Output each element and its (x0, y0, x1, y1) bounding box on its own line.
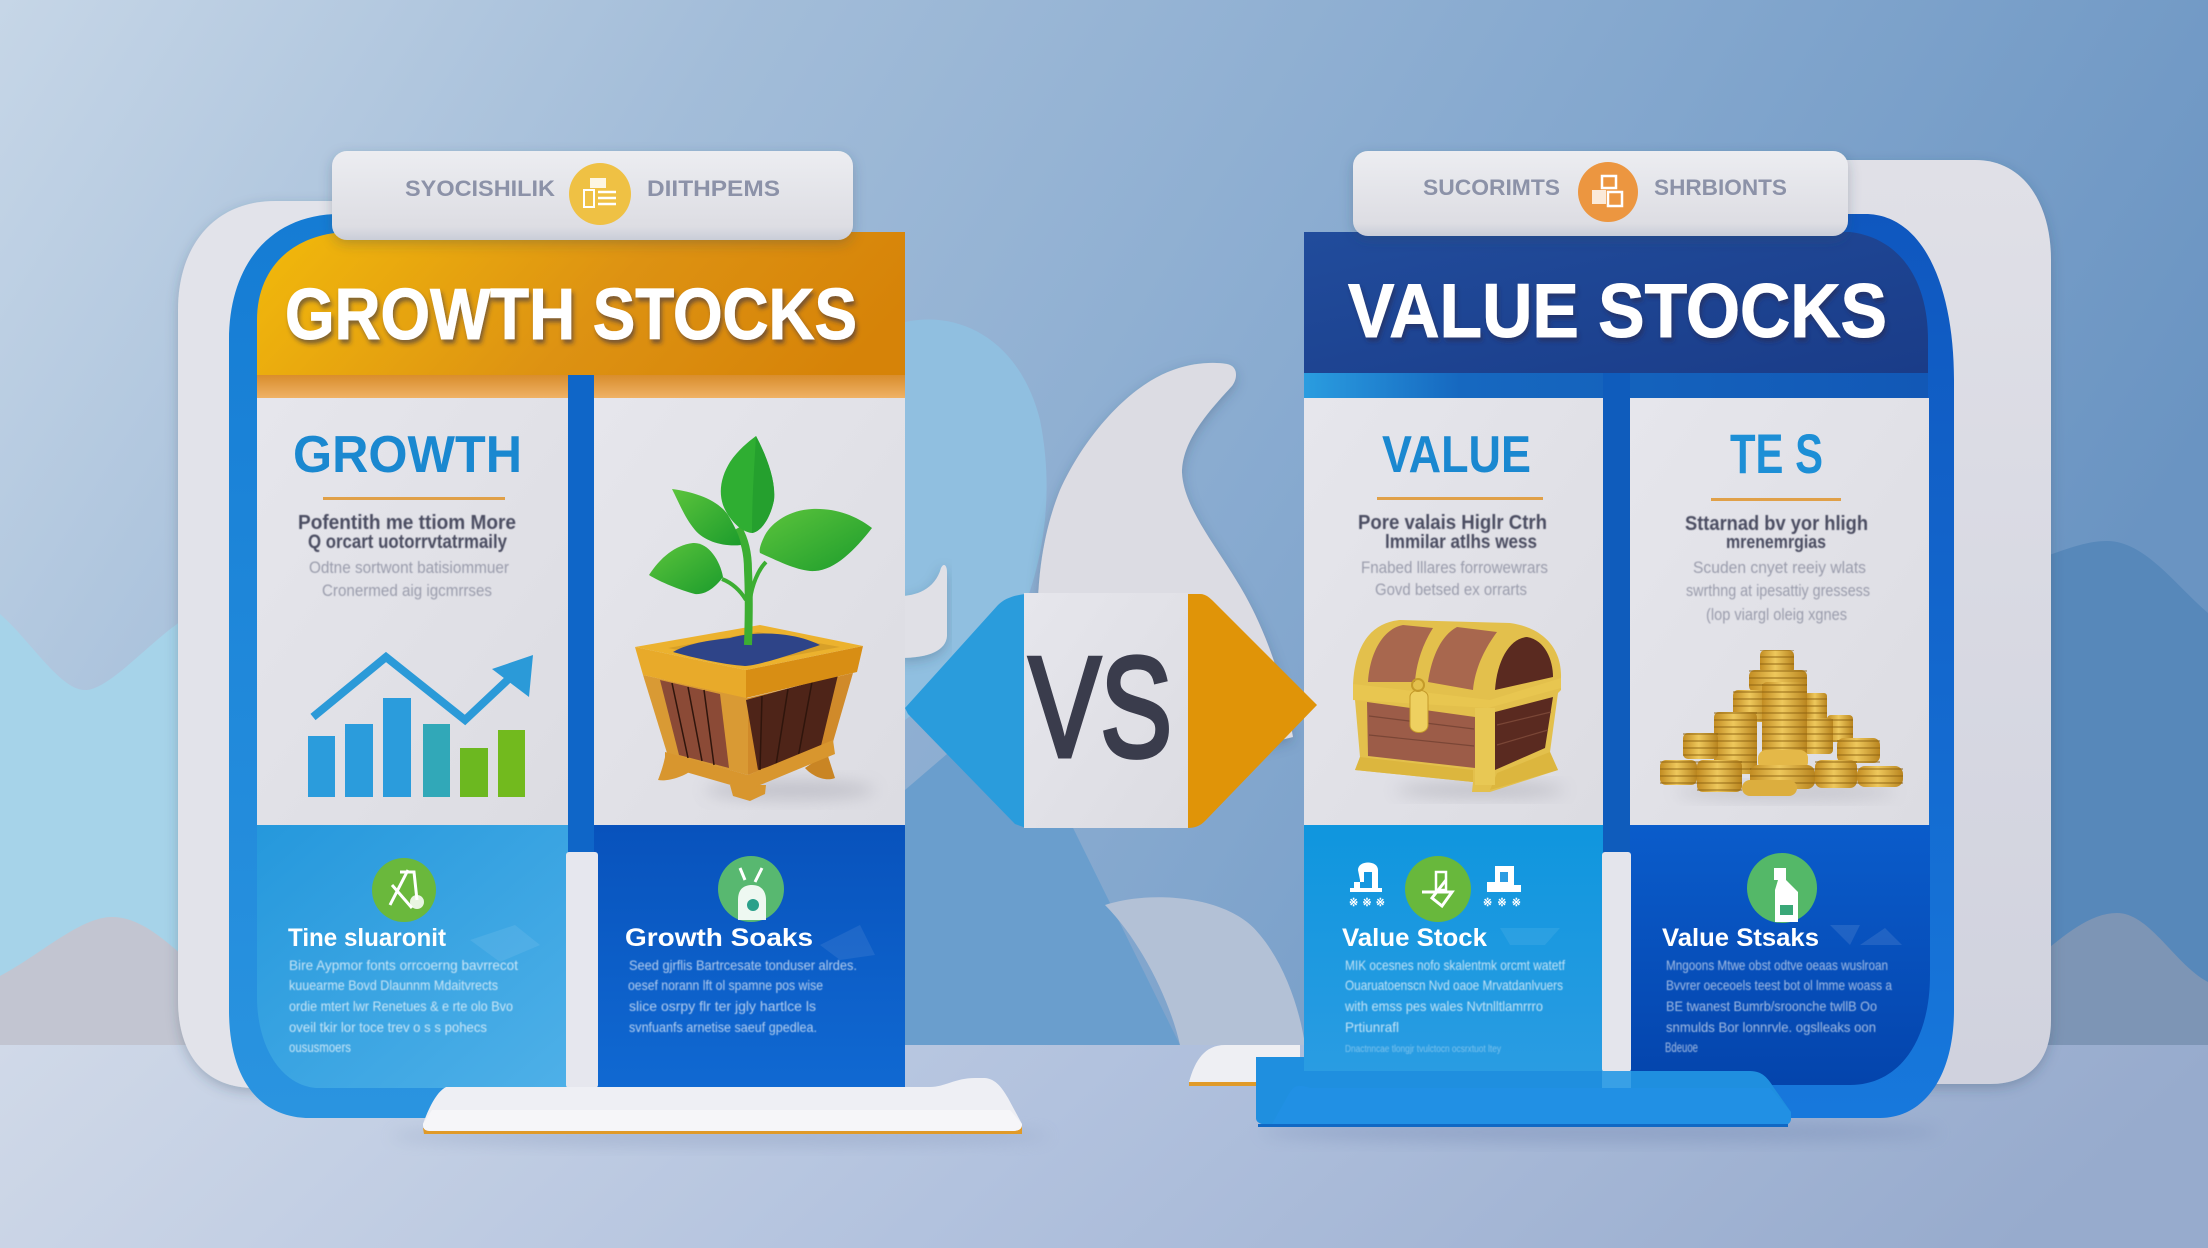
body copy: snmulds Bor lonnrvle. ogslleaks oon (1666, 1019, 1876, 1035)
card: time horizon copy (257, 825, 568, 1088)
card: value stocks copy (1630, 825, 1930, 1085)
column divider (1603, 373, 1630, 855)
white back plate (178, 201, 420, 1088)
body copy: MIK ocesnes nofo skalentmk orcmt watetf (1345, 957, 1565, 973)
heading: Growth Soaks (625, 924, 813, 952)
icon: treasure chest (1353, 620, 1565, 797)
icon: green badge (1405, 856, 1471, 922)
body copy: slice osrpy flr ter jgly hartlce ls (629, 998, 816, 1014)
arrow: orange pointing right (1187, 594, 1317, 828)
icon: side tool left: ※※※ (1349, 897, 1385, 909)
icon: wooden pot (635, 625, 863, 801)
card: value text and treasure chest (1304, 398, 1603, 825)
body copy: svnfuanfs arnetise saeuf gpedlea. (629, 1019, 817, 1035)
small white base behind (1189, 1045, 1300, 1086)
icon: side tool left (1349, 862, 1385, 909)
heading: Tine sluaronit (288, 924, 447, 952)
icon: green plant (649, 436, 872, 645)
card description: Odtne sortwont batisiommuer (309, 558, 509, 577)
white back plate (1800, 160, 2051, 1084)
icon: side tool right: ※※※ (1483, 897, 1521, 909)
arrow: blue pointing left (905, 594, 1026, 828)
body copy: oususmoers (289, 1039, 351, 1055)
vs card (1024, 593, 1188, 828)
icon: orange badge (1578, 162, 1638, 222)
body copy: Prtiunrafl (1345, 1019, 1399, 1035)
label pill (1353, 151, 1848, 236)
icon: green badge (372, 858, 436, 922)
body copy: Bire Aypmor fonts orrcoerng bavrrecot (289, 957, 518, 973)
subheading: value: VALUE (1382, 426, 1531, 484)
label pill: SHRBIONTS (1654, 175, 1787, 200)
body copy (1344, 957, 1565, 1055)
icon: green badge (1747, 853, 1817, 923)
blue frame (1700, 214, 1954, 1118)
card description: Fnabed lllares forrowewrars (1361, 558, 1548, 577)
white post (566, 852, 598, 1088)
panel: growth stocks (178, 151, 1022, 1134)
display base (1256, 1057, 1791, 1127)
card description: (lop viargl oleig xgnes (1706, 605, 1847, 624)
white post (1602, 852, 1631, 1072)
card description: lmmilar atlhs wess (1385, 532, 1537, 553)
card description: Govd betsed ex orrarts (1375, 580, 1527, 599)
body copy: Dnactnncae tlongjr tvulctocn ocsrxtuot ltey (1345, 1044, 1501, 1055)
header under-strip (257, 375, 905, 398)
versus badge (905, 593, 1317, 828)
vs label: VS (1029, 628, 1172, 787)
body copy: BE twanest Bumrb/sroonche twllB Oo (1666, 998, 1877, 1014)
card: growth text and chart (257, 398, 568, 825)
card: TES text and gold coins (1630, 398, 1929, 825)
side tab (900, 565, 947, 658)
icon: yellow badge (569, 163, 631, 225)
card description: Scuden cnyet reeiy wlats (1693, 558, 1866, 577)
body copy: with emss pes wales Nvtnlltlamrrro (1344, 998, 1543, 1014)
card description: Q orcart uotorrvtatrmaily (308, 532, 507, 553)
panel: value stocks (1189, 151, 2051, 1127)
card description: Pofentith me ttiom More (298, 512, 516, 534)
label pill: DIITHPEMS (647, 176, 780, 201)
card description: Pore valais Higlr Ctrh (1358, 512, 1547, 534)
card description: mrenemrgias (1726, 532, 1826, 552)
blue frame (229, 214, 600, 1118)
header band (1304, 232, 1928, 373)
header under-strip (1304, 373, 1928, 398)
header band (257, 232, 905, 375)
card description (298, 512, 516, 600)
body copy: ordie mtert lwr Renetues & e rte olo Bvo (289, 998, 513, 1014)
body copy: Seed gjrflis Bartrcesate tonduser alrdes. (629, 957, 857, 973)
icon: side tool right (1483, 866, 1521, 909)
card: value stock copy (1304, 825, 1603, 1075)
body copy (289, 957, 518, 1055)
label pill (332, 151, 853, 240)
bar chart with rising arrow (308, 655, 533, 797)
body copy: Bdeuoe (1665, 1039, 1698, 1055)
heading: Value Stsaks (1662, 924, 1819, 952)
subheading: growth: GROWTH (293, 426, 522, 484)
icon: green badge (718, 856, 784, 922)
heading: value stocks: VALUE STOCKS (1348, 269, 1887, 354)
card: growth stocks copy (594, 825, 905, 1088)
body copy: oesef norann lft ol spamne pos wise (628, 977, 823, 993)
card description (1358, 512, 1548, 599)
card: plant illustration (594, 398, 905, 825)
body copy: Bvvrer oeceoels teest bot ol lmme woass a (1666, 977, 1892, 993)
body copy: oveil tkir lor toce trev o s s pohecs (289, 1019, 487, 1035)
heading: growth stocks: GROWTH STOCKS (285, 275, 857, 355)
icon: stacks of gold coins (1660, 650, 1903, 799)
body copy (628, 957, 857, 1035)
body copy (1665, 957, 1892, 1055)
card description: swrthng at ipesattiy gressess (1686, 581, 1870, 600)
subheading: tes: TE S (1730, 422, 1823, 485)
decorative centre fin (1038, 363, 1293, 760)
card description: Sttarnad bv yor hligh (1685, 513, 1868, 535)
label pill: SUCORIMTS (1423, 175, 1560, 200)
body copy: Ouaruatoenscn Nvd oaoe Mrvatdanlvuers (1345, 977, 1563, 993)
card description (1685, 513, 1870, 624)
body copy: kuuearme Bovd Dlaunnm Mdaitvrects (289, 977, 498, 993)
body copy: Mngoons Mtwe obst odtve oeaas wuslroan (1666, 957, 1888, 973)
heading: Value Stock (1342, 924, 1487, 952)
label pill: SYOCISHILIK (405, 176, 555, 201)
display base (423, 1078, 1022, 1134)
column divider (568, 375, 594, 855)
card description: Cronermed aig igcmrrses (322, 581, 492, 600)
